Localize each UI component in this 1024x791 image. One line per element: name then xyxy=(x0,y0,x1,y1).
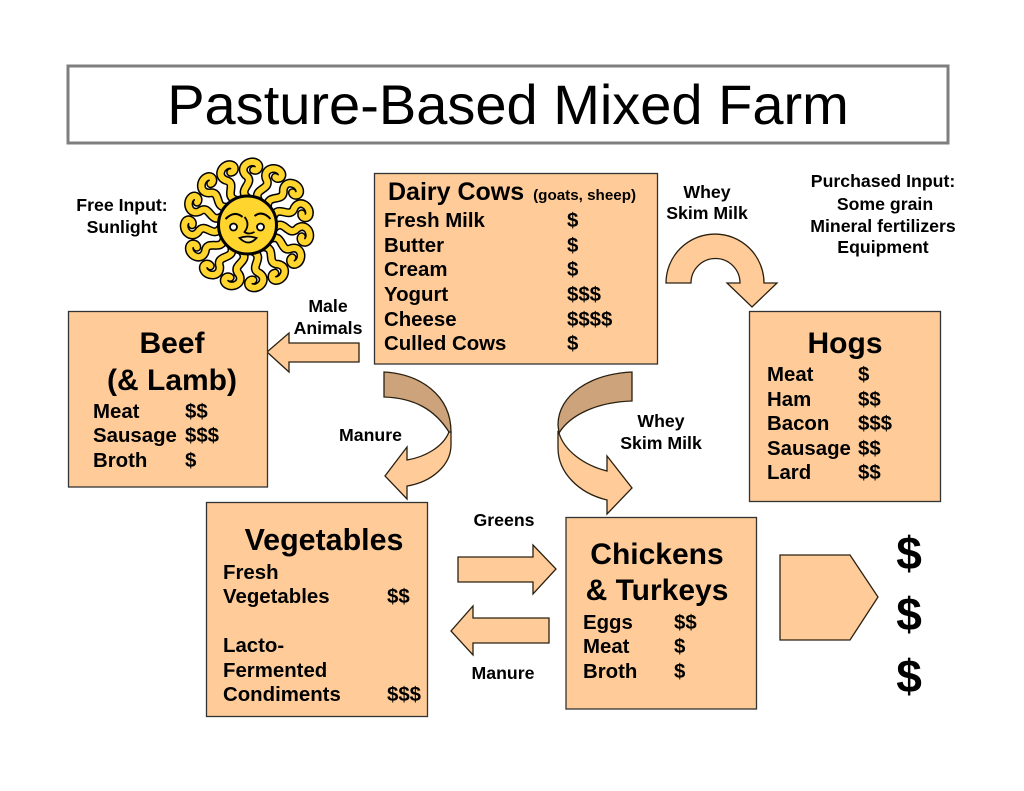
panel: beef and lamb: (& Lamb) xyxy=(107,364,237,397)
arrow: dairy to beef xyxy=(267,333,359,372)
panel: hogs: $$$ xyxy=(858,413,893,435)
label: free input sunlight: Sunlight xyxy=(87,217,157,237)
arrow: dairy to hogs xyxy=(666,234,777,307)
panel: vegetables: Condiments xyxy=(223,684,341,706)
title: Pasture-Based Mixed Farm xyxy=(167,73,849,136)
arrow: whey curved to chickens xyxy=(558,372,632,514)
label: male animals: Animals xyxy=(294,318,363,338)
list: dairy products: Culled Cows xyxy=(384,333,506,355)
panel: vegetables: Vegetables xyxy=(223,586,330,608)
panel: hogs: Lard xyxy=(767,462,811,484)
panel: vegetables: $$$ xyxy=(387,684,422,706)
list: dairy products: $$$$ xyxy=(567,309,613,331)
label: free input sunlight: Free Input: xyxy=(76,195,168,215)
label: manure: Manure xyxy=(339,425,402,445)
arrow: manure curved to vegetables xyxy=(384,372,451,499)
list: dairy products: $ xyxy=(567,235,579,257)
panel: beef and lamb: Broth xyxy=(93,450,147,472)
panel: hogs: Meat xyxy=(767,364,814,386)
panel: beef and lamb: $$$ xyxy=(185,425,220,447)
panel: beef and lamb: Meat xyxy=(93,401,140,423)
panel: chickens and turkeys: Broth xyxy=(583,661,637,683)
money symbols: $ xyxy=(896,588,922,640)
panel: vegetables: $$ xyxy=(387,586,410,608)
panel: chickens and turkeys xyxy=(566,518,756,709)
panel: vegetables: Vegetables xyxy=(245,523,403,557)
panel: beef and lamb: $ xyxy=(185,450,197,472)
label: purchased input: Purchased Input: xyxy=(811,171,955,191)
panel: chickens and turkeys: $ xyxy=(674,661,686,683)
list: dairy products: $$$ xyxy=(567,284,602,306)
panel: hogs: Sausage xyxy=(767,438,851,460)
title xyxy=(68,66,948,143)
label: free input sunlight xyxy=(76,195,168,237)
panel: vegetables: Lacto- xyxy=(223,635,284,657)
panel: chickens and turkeys: & Turkeys xyxy=(586,574,728,607)
panel: beef and lamb xyxy=(68,312,268,487)
money symbols xyxy=(896,527,922,702)
list: dairy products: Butter xyxy=(384,235,444,257)
panel: vegetables: Fermented xyxy=(223,660,327,682)
panel: hogs: $ xyxy=(858,364,870,386)
list: dairy products: Cream xyxy=(384,259,447,281)
heading: dairy cows: Dairy Cows (goats, sheep) xyxy=(388,178,636,206)
panel: chickens and turkeys: $$ xyxy=(674,612,697,634)
panel: beef and lamb: Beef xyxy=(139,327,206,360)
panel: chickens and turkeys: Meat xyxy=(583,636,630,658)
label: whey skim milk to hogs: Skim Milk xyxy=(666,203,748,223)
label: purchased input: Some grain xyxy=(837,194,933,214)
label: whey skim milk to chickens: Whey xyxy=(637,411,685,431)
money symbols: $ xyxy=(896,527,922,579)
panel: dairy cows xyxy=(374,174,658,364)
label: whey skim milk to chickens: Skim Milk xyxy=(620,433,702,453)
label: male animals: Male xyxy=(308,296,348,316)
list: dairy products: $ xyxy=(567,210,579,232)
panel: beef and lamb: $$ xyxy=(185,401,208,423)
panel: chickens and turkeys: Chickens xyxy=(590,538,724,571)
list: dairy products: $ xyxy=(567,259,579,281)
panel: hogs: $$ xyxy=(858,389,881,411)
list: dairy products: Yogurt xyxy=(384,284,448,306)
panel: hogs: $$ xyxy=(858,438,881,460)
label: male animals xyxy=(294,296,363,338)
arrow: greens to chickens xyxy=(458,545,556,594)
arrow: manure to vegetables xyxy=(451,606,549,655)
label: greens: Greens xyxy=(474,510,535,530)
label: whey skim milk to hogs: Whey xyxy=(683,182,731,202)
arrow: pentagon output xyxy=(780,555,878,640)
label: whey skim milk to hogs xyxy=(666,182,748,223)
label: whey skim milk to chickens xyxy=(620,411,702,453)
panel: hogs xyxy=(750,312,940,502)
panel: vegetables: Fresh xyxy=(223,562,279,584)
panel: hogs: Ham xyxy=(767,389,811,411)
money symbols: $ xyxy=(896,650,922,702)
list: dairy products: $ xyxy=(567,333,579,355)
label: purchased input: Mineral fertilizers xyxy=(810,216,956,236)
panel: hogs: Bacon xyxy=(767,413,829,435)
panel: chickens and turkeys: $ xyxy=(674,636,686,658)
panel: hogs: Hogs xyxy=(808,327,882,360)
panel: chickens and turkeys: Eggs xyxy=(583,612,633,634)
panel: beef and lamb: Sausage xyxy=(93,425,177,447)
icon: sun xyxy=(184,162,311,289)
label: manure from chickens: Manure xyxy=(472,663,535,683)
label: purchased input xyxy=(810,171,956,257)
list: dairy products xyxy=(384,210,613,355)
list: dairy products: Cheese xyxy=(384,309,457,331)
label: purchased input: Equipment xyxy=(837,237,929,257)
list: dairy products: Fresh Milk xyxy=(384,210,486,232)
panel: hogs: $$ xyxy=(858,462,881,484)
panel: vegetables xyxy=(206,502,428,716)
